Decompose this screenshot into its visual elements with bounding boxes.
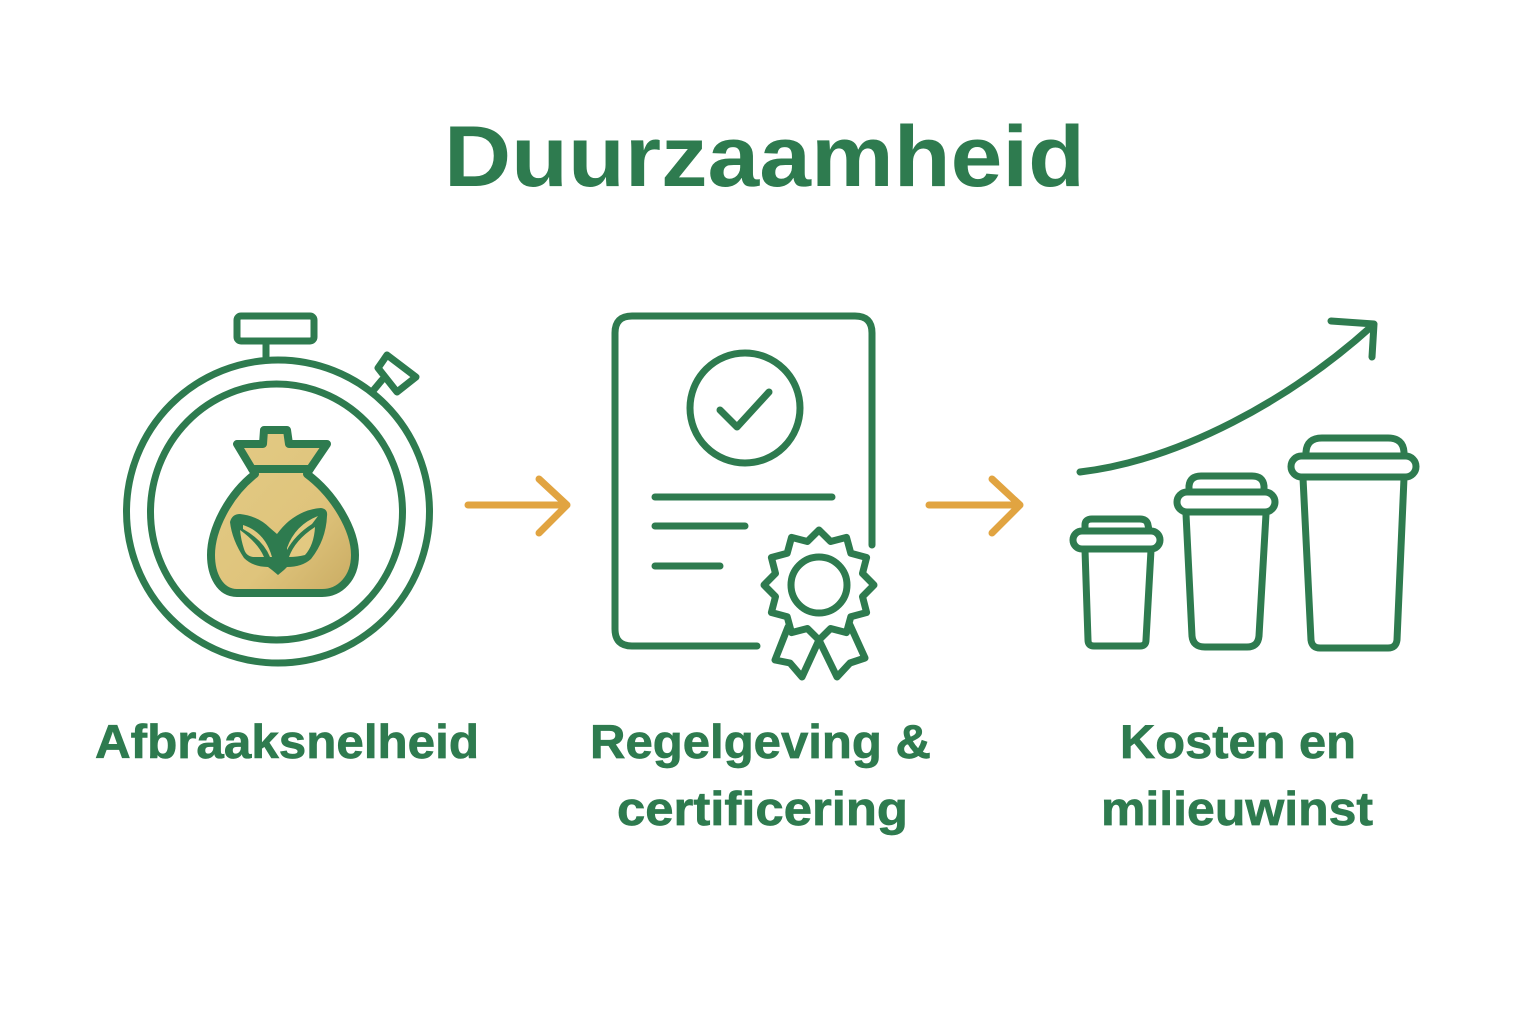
label: Kosten en milieuwinst: milieuwinst: [1101, 782, 1373, 835]
label: Kosten en milieuwinst: Kosten en: [1120, 715, 1356, 768]
label: Regelgeving & certificering: [590, 715, 931, 835]
text lines: [655, 497, 832, 566]
large cup: [1291, 438, 1416, 648]
stopwatch top button: [237, 316, 314, 357]
bag: [211, 430, 355, 593]
icon: stopwatch with compost bag: [126, 316, 430, 663]
icon: certificate: [615, 316, 874, 677]
stopwatch inner ring: [150, 384, 402, 640]
document outline: [615, 316, 872, 646]
arrow 1: [468, 479, 567, 533]
leaves: [230, 508, 327, 575]
label: Regelgeving & certificering: certificering: [617, 782, 908, 835]
stopwatch outer ring: [126, 360, 430, 663]
medium cup: [1177, 476, 1275, 647]
rosette badge: [764, 530, 874, 677]
rising arrow: [1080, 321, 1374, 472]
check circle: [690, 353, 800, 463]
label: Afbraaksnelheid: Afbraaksnelheid: [95, 715, 479, 768]
stopwatch side button: [372, 355, 416, 392]
label: Kosten en milieuwinst: [1101, 715, 1373, 835]
small cup: [1073, 519, 1160, 646]
icon: cups with rising arrow: [1073, 321, 1416, 648]
title: Duurzaamheid: [444, 109, 1085, 205]
arrow 2: [929, 479, 1020, 533]
label: Regelgeving & certificering: Regelgeving &: [590, 715, 931, 768]
